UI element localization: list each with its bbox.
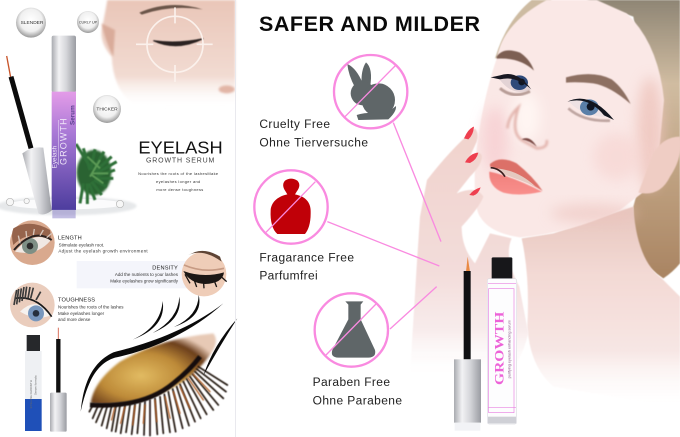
label: cruelty free: Cruelty Free — [259, 117, 330, 131]
tube body: GROWTH — [492, 311, 506, 385]
label: fragarance free — [259, 250, 354, 283]
text: length: LENGTH — [58, 235, 82, 241]
text: length — [58, 235, 148, 254]
left eyebrow — [497, 50, 534, 71]
face — [475, 0, 664, 237]
bubble: slender: SLENDER — [21, 20, 44, 26]
label: paraben free: Ohne Parabene — [313, 393, 402, 407]
description text: Nourishes the roots of the lashesMake — [138, 171, 219, 176]
label: cruelty free — [259, 117, 368, 149]
blue serum tube: EYELASH GROWTH — [29, 380, 33, 408]
text: toughness: TOUGHNESS — [58, 297, 95, 303]
icon: crossed-out rabbit — [334, 55, 407, 128]
bubble: thicker: THICKER — [96, 107, 118, 113]
mascara wand — [7, 56, 52, 215]
text: toughness: and more dense — [58, 317, 91, 322]
eye photo: density — [182, 251, 227, 296]
left eye — [491, 74, 531, 95]
blue serum tube: Serum formula — [34, 375, 38, 395]
description text: eyelashes longer and — [156, 179, 201, 184]
ear — [638, 137, 680, 194]
label: paraben free — [313, 375, 402, 407]
label: cruelty free: Ohne Tierversuche — [259, 135, 368, 149]
hair — [495, 0, 680, 278]
eye shadow artwork — [89, 333, 227, 436]
text: density: Make eyelashes grow significantly — [110, 278, 179, 283]
panel: free-from badges — [254, 55, 441, 407]
nostril — [522, 138, 537, 147]
face shading — [482, 77, 663, 223]
text: length: Adjust the eyelash growth environment — [58, 249, 148, 254]
density highlight band — [77, 261, 187, 288]
right eye — [567, 99, 614, 121]
wand — [454, 257, 481, 431]
panel divider — [235, 0, 236, 437]
icon: crossed-out flask — [315, 293, 388, 367]
purple serum tube: Serum — [69, 105, 76, 125]
bubble: thicker — [93, 95, 121, 123]
neck and shoulders — [522, 207, 680, 408]
text: length: Stimulate eyelash root. — [59, 243, 104, 248]
nose — [507, 107, 547, 148]
blue serum tube — [25, 335, 42, 431]
text: toughness — [58, 297, 124, 322]
portrait photo — [410, 0, 680, 408]
green plant sprig — [76, 144, 117, 204]
closed eye face photo — [101, 0, 235, 109]
bubble: slender — [16, 8, 46, 38]
eye photo: toughness — [10, 283, 55, 327]
text: toughness: Nourishes the roots of the lashes — [58, 305, 124, 310]
bubble: curly up: CURLY UP — [79, 21, 98, 25]
text: density: DENSITY — [152, 265, 178, 271]
eye photo: length — [10, 220, 55, 265]
finger nails — [464, 127, 481, 196]
bubble: curly up — [77, 11, 99, 33]
text: density: Add the nutrients to your lashes — [115, 272, 179, 277]
icon: crossed-out perfume bottle — [254, 170, 328, 244]
text: toughness: Make eyelashes longer — [58, 311, 105, 316]
purple serum tube: Eyelash — [52, 145, 59, 168]
hand — [410, 128, 528, 383]
heading: safer and milder: SAFER AND MILDER — [259, 12, 480, 36]
tube body: purifying eyelash enhancing serum — [507, 319, 512, 378]
water splash — [0, 197, 137, 215]
lips — [489, 159, 543, 194]
right eyebrow — [566, 74, 631, 104]
description text: more dense toughness — [156, 187, 204, 192]
description text — [138, 171, 219, 192]
tube body — [487, 257, 517, 424]
text: density — [110, 265, 179, 283]
black swoosh lines — [81, 295, 237, 412]
blue tube wand — [50, 328, 67, 432]
label: fragarance free: Parfumfrei — [259, 269, 318, 283]
panel: benefits and eye shadow — [10, 220, 237, 436]
heading: eyelash: EYELASH — [138, 138, 223, 158]
purple serum tube: GROWTH — [59, 118, 69, 165]
connector lines — [327, 123, 441, 329]
purple serum tube — [52, 36, 76, 218]
product: pink serum tube — [454, 257, 517, 431]
label: paraben free: Paraben Free — [313, 375, 390, 389]
panel: serum overview — [0, 0, 235, 218]
label: fragarance free: Fragarance Free — [259, 250, 354, 264]
subheading: growth serum: GROWTH SERUM — [146, 158, 215, 165]
